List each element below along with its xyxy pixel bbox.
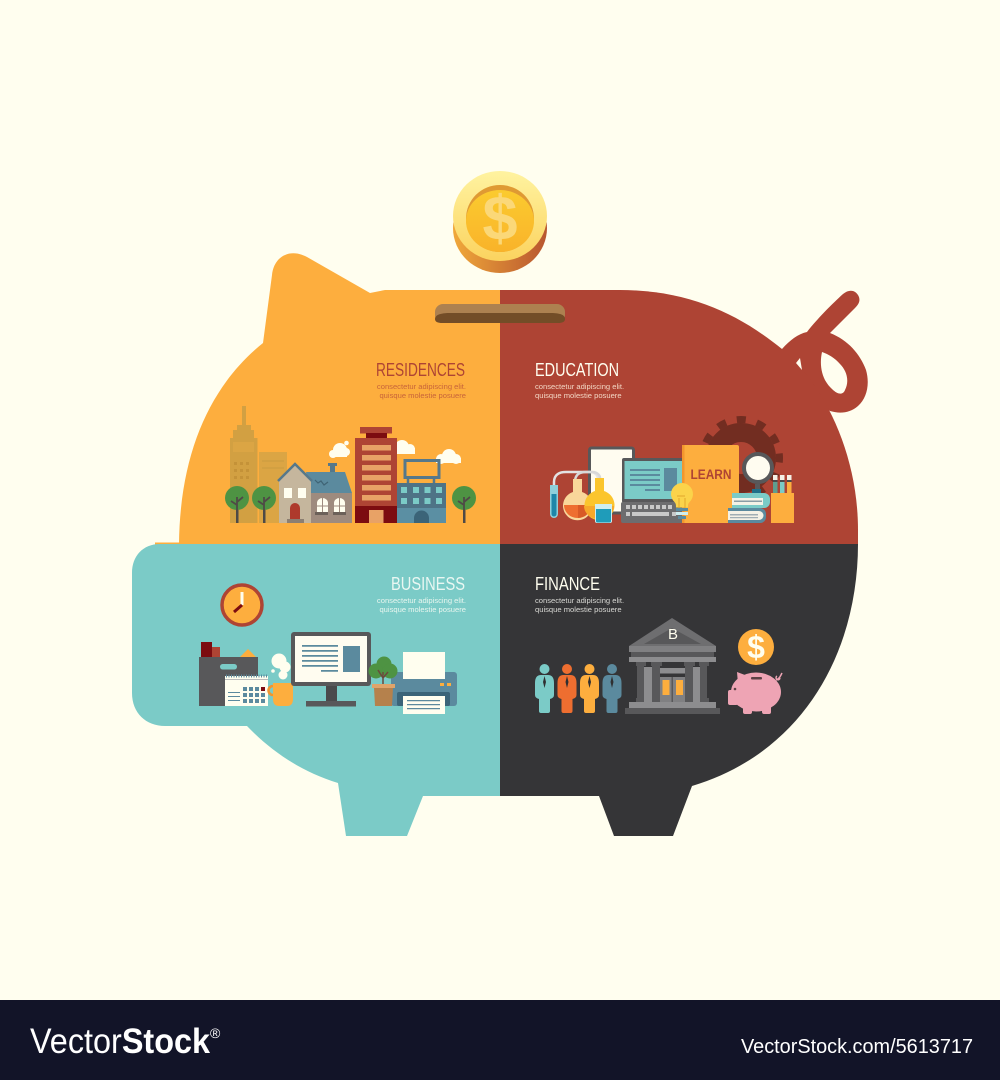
tail [782, 291, 868, 413]
heading: finance: FINANCE [535, 574, 600, 594]
finance illustration [535, 618, 782, 714]
small gap between tail and body [796, 358, 802, 370]
heading: business [377, 574, 466, 614]
quadrant: business body [132, 544, 500, 836]
piggy bank [132, 253, 868, 836]
image id: VectorStock.com/5613717 [741, 1036, 973, 1058]
laptop [621, 458, 685, 523]
wall clock [222, 585, 262, 625]
logo: VectorStock [30, 1022, 210, 1061]
monitor [291, 632, 371, 706]
heading: education [535, 360, 624, 400]
quadrant: residences body [179, 253, 500, 544]
business illustration [199, 585, 457, 714]
gold coin [453, 171, 547, 273]
calendar [225, 676, 268, 706]
gold coin: $ [482, 184, 518, 254]
house with brown annex [278, 463, 352, 523]
registered mark: ® [210, 1025, 221, 1041]
tall towers [230, 406, 287, 523]
gear [698, 415, 784, 501]
heading: finance [535, 574, 624, 614]
red apartment block [355, 427, 397, 523]
tablet [590, 448, 634, 513]
book: learn [682, 445, 739, 523]
bank building [625, 618, 720, 714]
dollar coin [738, 629, 774, 665]
orange lip above snout [155, 542, 181, 544]
clouds [329, 440, 461, 464]
pencil cup [771, 475, 794, 523]
heading: business: BUSINESS [391, 574, 465, 594]
small pink piggy [728, 672, 782, 714]
heading: education: quisque molestie posuere [535, 391, 622, 400]
education illustration [550, 415, 794, 523]
heading: residences: quisque molestie posuere [379, 391, 466, 400]
heading: residences [376, 360, 466, 400]
file box [199, 642, 258, 706]
row of people [535, 664, 622, 713]
magnifier [744, 454, 772, 494]
book: learn: LEARN [690, 467, 732, 482]
coin slot [435, 304, 565, 323]
heading: finance: quisque molestie posuere [535, 605, 622, 614]
residences illustration [225, 406, 476, 523]
light bulb [671, 483, 693, 519]
potted plant [368, 656, 398, 706]
quadrant: finance body [500, 544, 858, 836]
stacked books [728, 493, 770, 523]
footer bar [0, 1000, 1000, 1080]
dollar coin: $ [747, 629, 765, 665]
trees [225, 486, 476, 523]
heading: residences: consectetur adipiscing elit. [377, 382, 466, 391]
flasks and test tube [550, 472, 614, 523]
heading: education: consectetur adipiscing elit. [535, 382, 624, 391]
heading: education: EDUCATION [535, 360, 619, 380]
quadrant: education body [500, 290, 858, 544]
coffee mug [268, 654, 293, 706]
heading: business: quisque molestie posuere [379, 605, 466, 614]
heading: finance: consectetur adipiscing elit. [535, 596, 624, 605]
printer [391, 652, 457, 714]
heading: business: consectetur adipiscing elit. [377, 596, 466, 605]
bank building: B [668, 626, 678, 643]
heading: residences: RESIDENCES [376, 360, 465, 380]
blue office with billboard [397, 460, 446, 523]
